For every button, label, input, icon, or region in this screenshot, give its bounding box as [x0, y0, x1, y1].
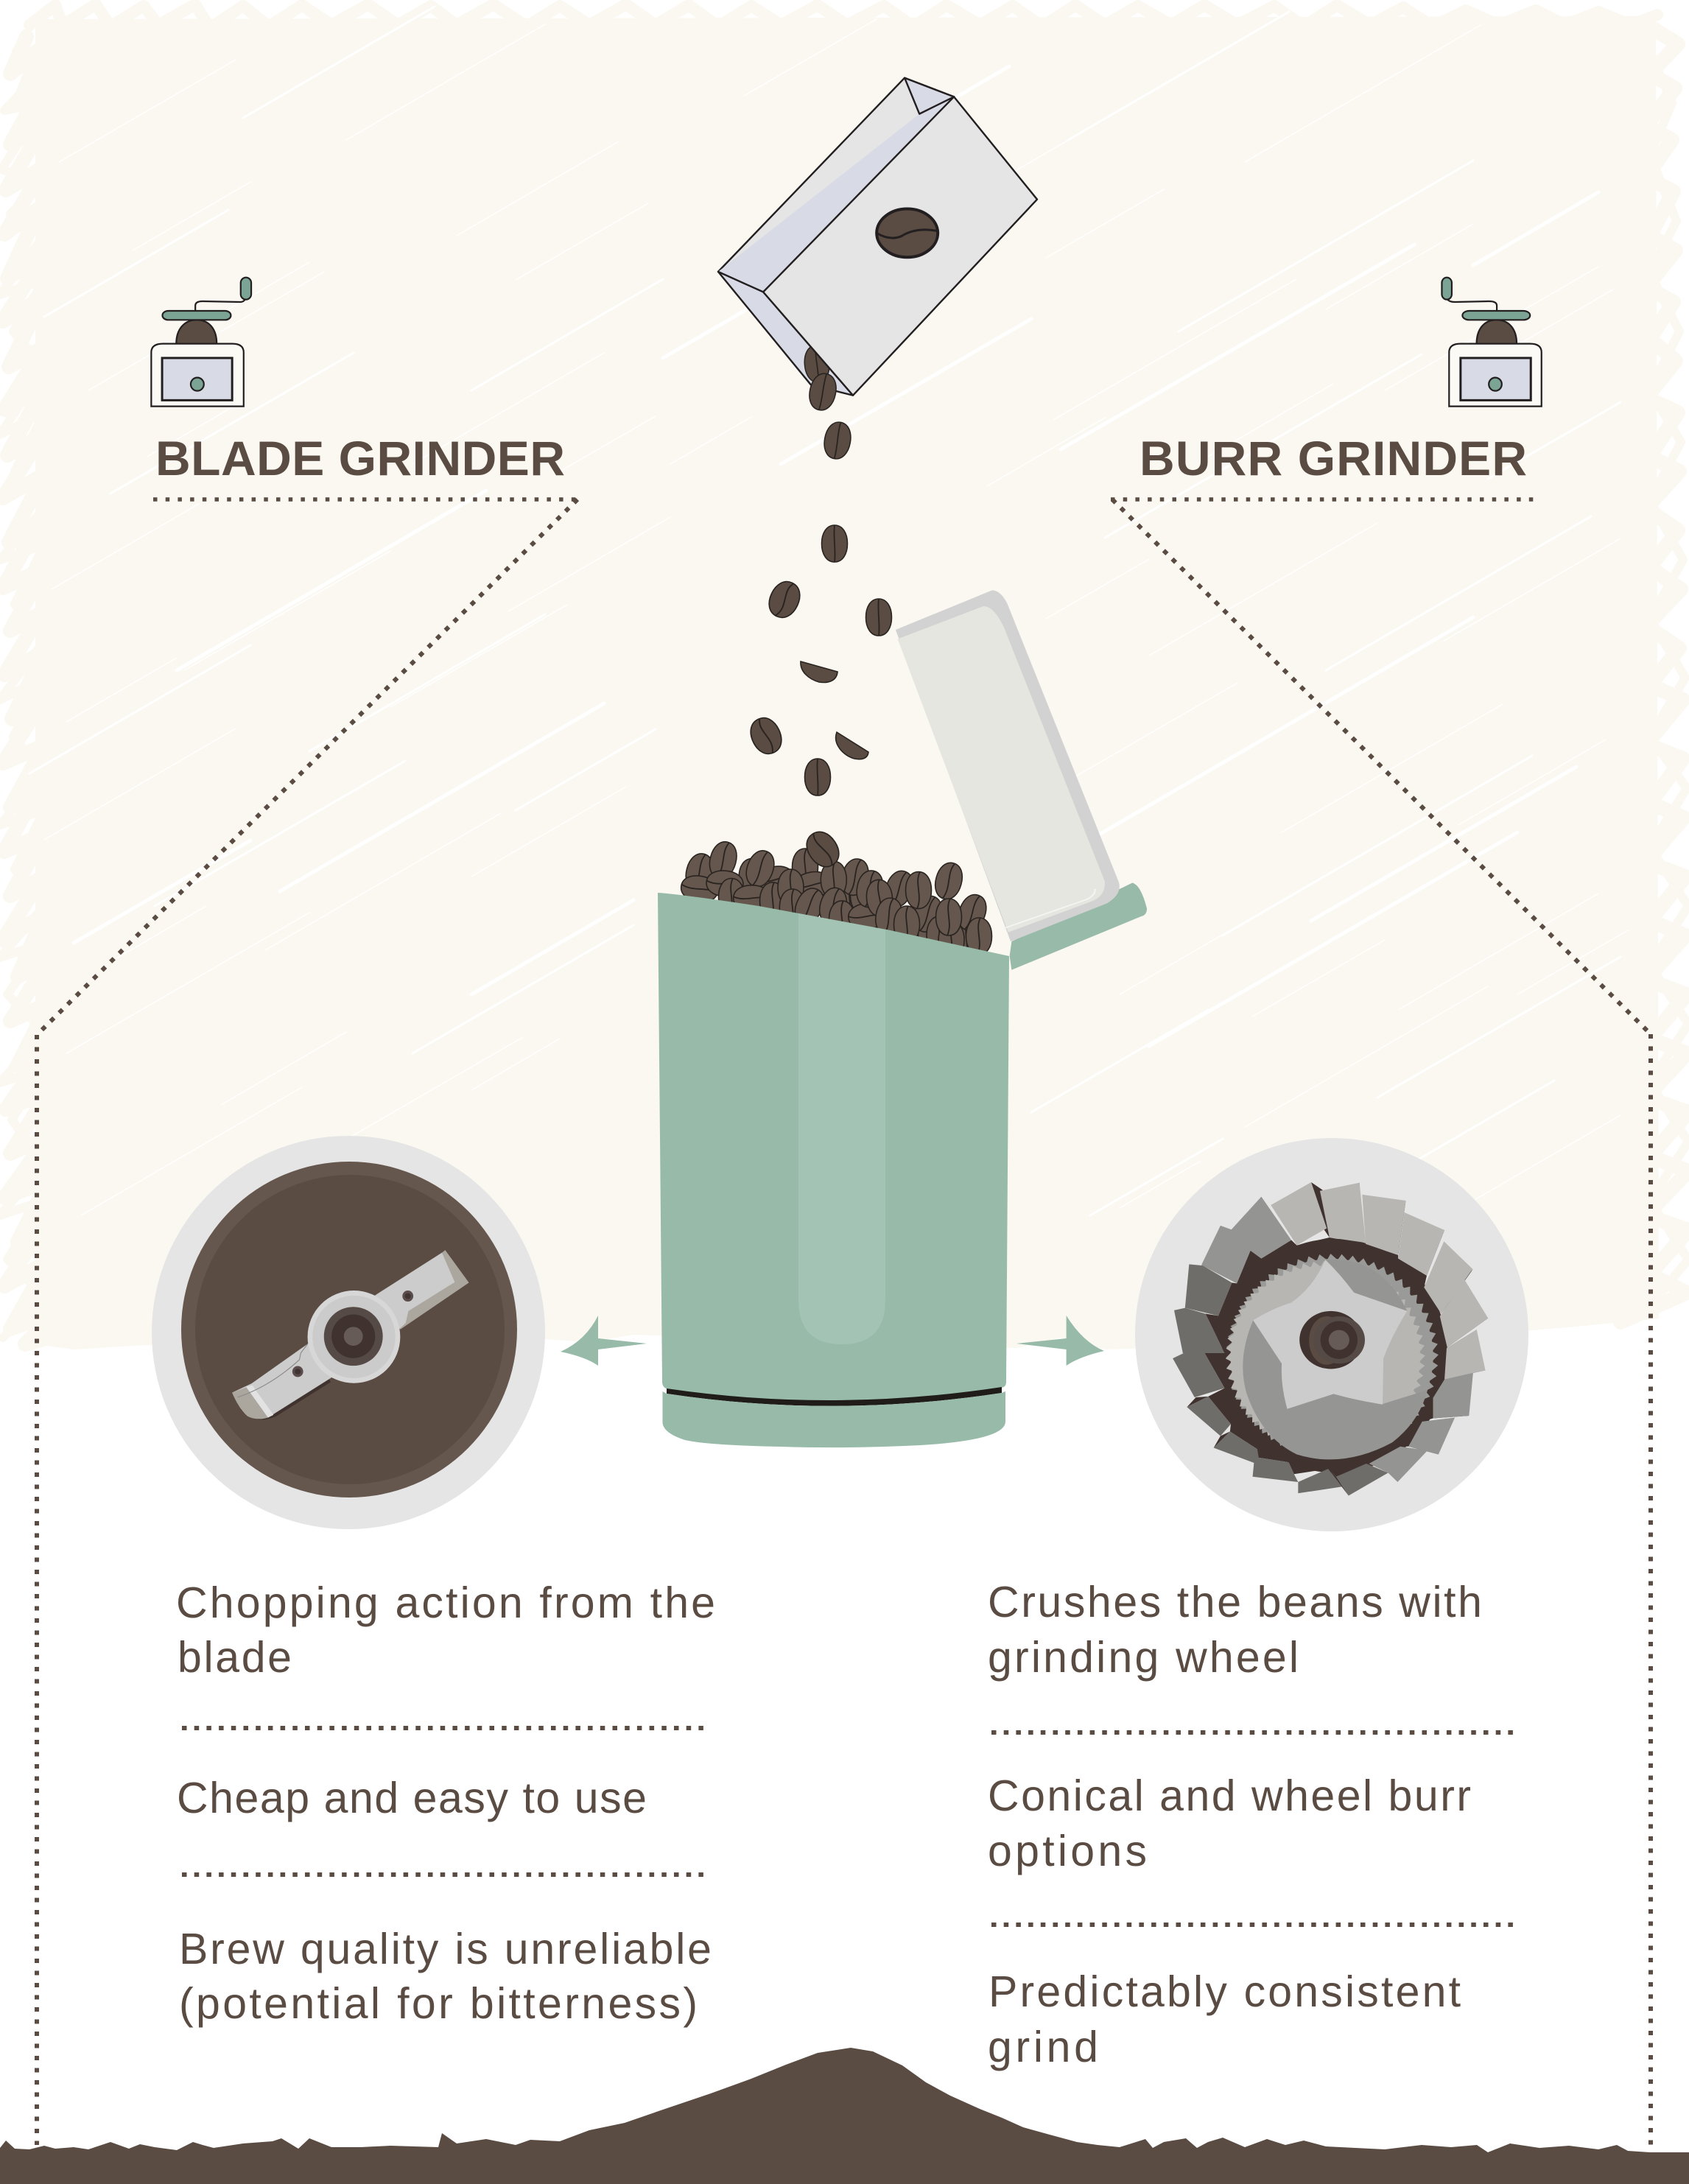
heading: burr grinder: BURR GRINDER [1140, 431, 1527, 485]
coffee bag pouring beans [718, 78, 1037, 461]
grinder lid hinge [1010, 883, 1147, 970]
text block: blade grinder points: Brew quality is unreliable [179, 1925, 712, 1973]
arrow: to blade grinder [561, 1316, 647, 1366]
text block: burr grinder points: Conical and wheel burr [988, 1772, 1471, 1820]
text block: burr grinder points: grinding wheel [988, 1633, 1299, 1682]
ground coffee mound [0, 2048, 1689, 2184]
burr outer teeth [1173, 1182, 1488, 1496]
burr grinder illustration [1135, 1138, 1528, 1531]
cream scribbled background [0, 4, 1688, 1352]
text block: blade grinder points: blade [178, 1633, 292, 1682]
blade grinder dotted frame [37, 499, 577, 2145]
pile of coffee beans [679, 826, 991, 958]
burr gear [1216, 1244, 1448, 1468]
grinder open lid [896, 590, 1120, 941]
grinder base [662, 1391, 1005, 1447]
grinder body [658, 893, 1009, 1447]
burr grinder dotted frame [1111, 499, 1651, 2145]
text block: blade grinder points: Chopping action from the [176, 1579, 715, 1627]
text block: blade grinder points: Cheap and easy to use [177, 1774, 647, 1822]
text block: burr grinder points [988, 1578, 1514, 2071]
text block: burr grinder points: Predictably consistent [989, 1967, 1461, 2016]
icon: hand grinder left [151, 278, 251, 407]
text block: blade grinder points [176, 1579, 715, 2028]
blade [232, 1250, 469, 1419]
icon: hand grinder right [1442, 278, 1542, 407]
heading: blade grinder: BLADE GRINDER [155, 431, 565, 485]
blade grinder illustration [152, 1136, 545, 1529]
burr hub [1299, 1311, 1365, 1369]
arrow: to burr grinder [1016, 1316, 1104, 1366]
text block: burr grinder points: grind [988, 2023, 1098, 2071]
text block: burr grinder points: Crushes the beans with [988, 1578, 1482, 1626]
body highlight stripe [798, 913, 885, 1344]
text block: burr grinder points: options [988, 1827, 1147, 1875]
falling coffee beans [745, 525, 891, 796]
text block: blade grinder points: (potential for bitterness) [179, 1979, 698, 2028]
